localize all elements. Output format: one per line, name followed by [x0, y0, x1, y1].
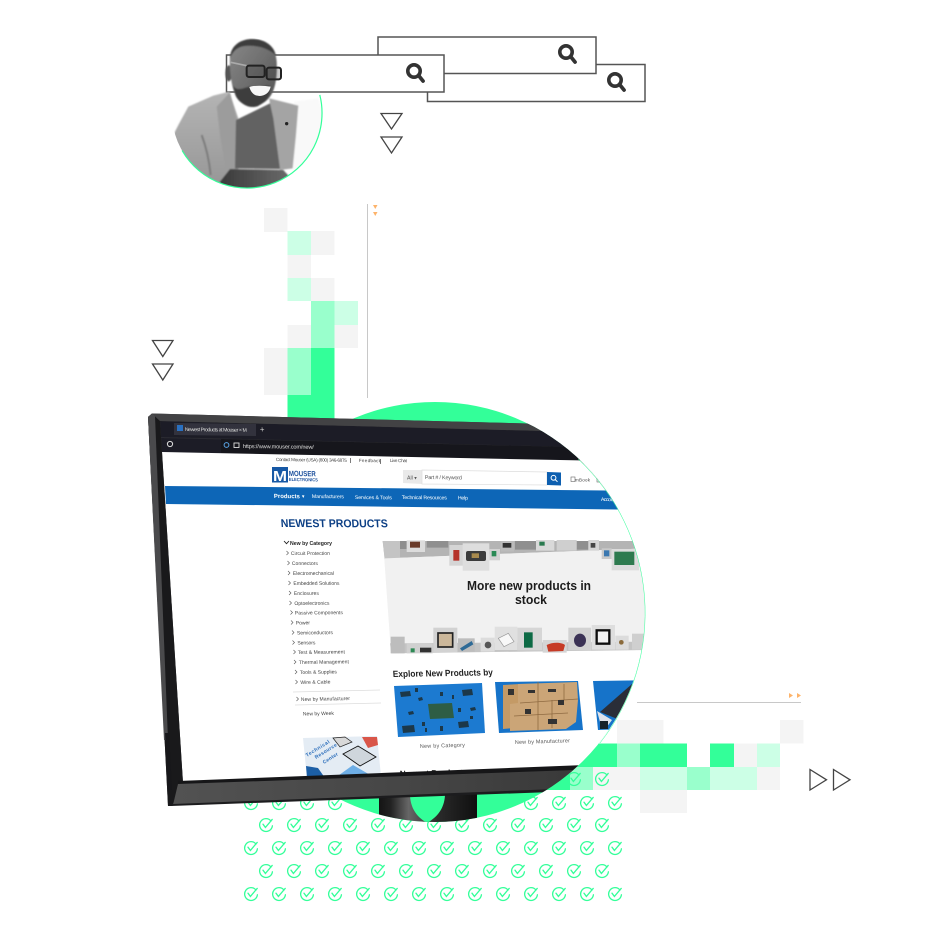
hero banner — [383, 540, 660, 653]
monitor — [148, 414, 660, 806]
tile: new by category photo — [394, 683, 485, 737]
search bar: back top — [378, 37, 596, 74]
infographic canvas — [148, 36, 852, 902]
triangles: left — [152, 340, 173, 380]
page utility row: Live Chat — [390, 458, 408, 463]
navigation bar: Technical Resources — [402, 495, 448, 501]
category sidebar: Thermal Management — [299, 659, 350, 666]
navigation bar: Services & Tools — [355, 495, 393, 501]
Mouser logo — [272, 467, 318, 482]
category sidebar: Electromechanical — [293, 571, 334, 577]
page content — [165, 457, 660, 779]
hero banner: stock — [515, 592, 548, 607]
category sidebar: Wire & Cable — [300, 679, 331, 686]
navigation bar — [165, 486, 618, 510]
Mouser logo: MOUSER — [289, 469, 317, 478]
technical resource center ad — [303, 736, 381, 778]
category sidebar: Enclosures — [294, 591, 320, 597]
site search box — [403, 470, 600, 486]
browser chrome: Newest Products at Mouser × M — [185, 427, 247, 434]
site search box: Part # / Keyword — [425, 475, 462, 481]
category sidebar: Test & Measurement — [298, 649, 346, 656]
category sidebar: Power — [296, 620, 310, 626]
search bar: front — [226, 55, 444, 92]
category sidebar: New by Manufacturer — [301, 696, 350, 703]
tile: third product photo — [593, 680, 634, 730]
category sidebar: Semiconductors — [297, 630, 334, 636]
section heading: newest products: Newest Products — [399, 768, 468, 779]
category sidebar: Sensors — [297, 640, 316, 646]
page heading: NEWEST PRODUCTS — [280, 518, 389, 530]
banner product tiles — [383, 540, 647, 653]
navigation bar: Account — [601, 497, 618, 503]
web page — [162, 452, 660, 783]
site search box: All ▾ — [407, 476, 417, 482]
checkmark pattern — [245, 773, 621, 900]
category sidebar: Passive Components — [295, 610, 344, 616]
category sidebar: New by Week — [303, 711, 335, 717]
category sidebar: Tools & Supplies — [300, 669, 338, 676]
category sidebar: Connectors — [292, 561, 319, 567]
browser chrome — [160, 421, 584, 464]
pixel grid: horizontal — [547, 720, 804, 813]
tile captions: New by Manufacturer — [515, 738, 570, 746]
triangles: below search bars — [381, 114, 402, 153]
browser chrome: + — [260, 425, 265, 434]
category sidebar: Embedded Solutions — [293, 581, 340, 587]
category sidebar — [284, 541, 381, 717]
technical resource center ad: Resource — [314, 742, 338, 761]
portrait: man in blazer — [174, 38, 300, 188]
monitor left edge and button — [148, 414, 183, 806]
monitor top edge — [154, 414, 542, 431]
Mouser logo: ELECTRONICS — [289, 477, 318, 482]
navigation bar: Manufacturers — [312, 494, 345, 500]
category sidebar: New by Category — [290, 541, 332, 547]
technical resource center ad: Center — [322, 752, 340, 766]
section heading: explore: Explore New Products by — [392, 667, 493, 679]
portrait green ring arc — [182, 95, 322, 188]
green circle backdrop — [225, 402, 645, 822]
site search box: mBook — [575, 478, 591, 482]
search bar: back right — [428, 64, 645, 102]
navigation bar: Products — [274, 494, 301, 500]
tile captions: New by Category — [420, 743, 465, 750]
category sidebar: Optoelectronics — [294, 601, 330, 607]
page utility row — [276, 457, 408, 464]
technical resource center ad: Technical — [305, 739, 331, 759]
monitor bottom bar — [172, 765, 579, 806]
vertical rule with orange markers — [367, 204, 378, 398]
monitor bezel — [148, 414, 660, 806]
navigation bar: ▾ — [302, 494, 305, 500]
horizontal rule with orange markers — [637, 693, 801, 703]
banner text: More new products in — [467, 578, 591, 593]
Mouser logo: M — [273, 468, 287, 485]
pixel grid: vertical — [264, 208, 358, 420]
tile captions — [420, 739, 570, 749]
tile: new by manufacturer photo — [495, 681, 583, 733]
browser chrome: https://www.mouser.com/new/ — [243, 444, 315, 451]
navigation bar: Help — [458, 496, 468, 502]
page utility row: Feedback — [359, 458, 382, 463]
monitor stand — [379, 794, 477, 822]
category sidebar: Circuit Protection — [291, 551, 330, 557]
circle hairline edge — [578, 459, 645, 743]
page utility row: Contact Mouser (USA) (800) 346-6875 — [276, 457, 348, 463]
triangles: right — [810, 770, 850, 790]
